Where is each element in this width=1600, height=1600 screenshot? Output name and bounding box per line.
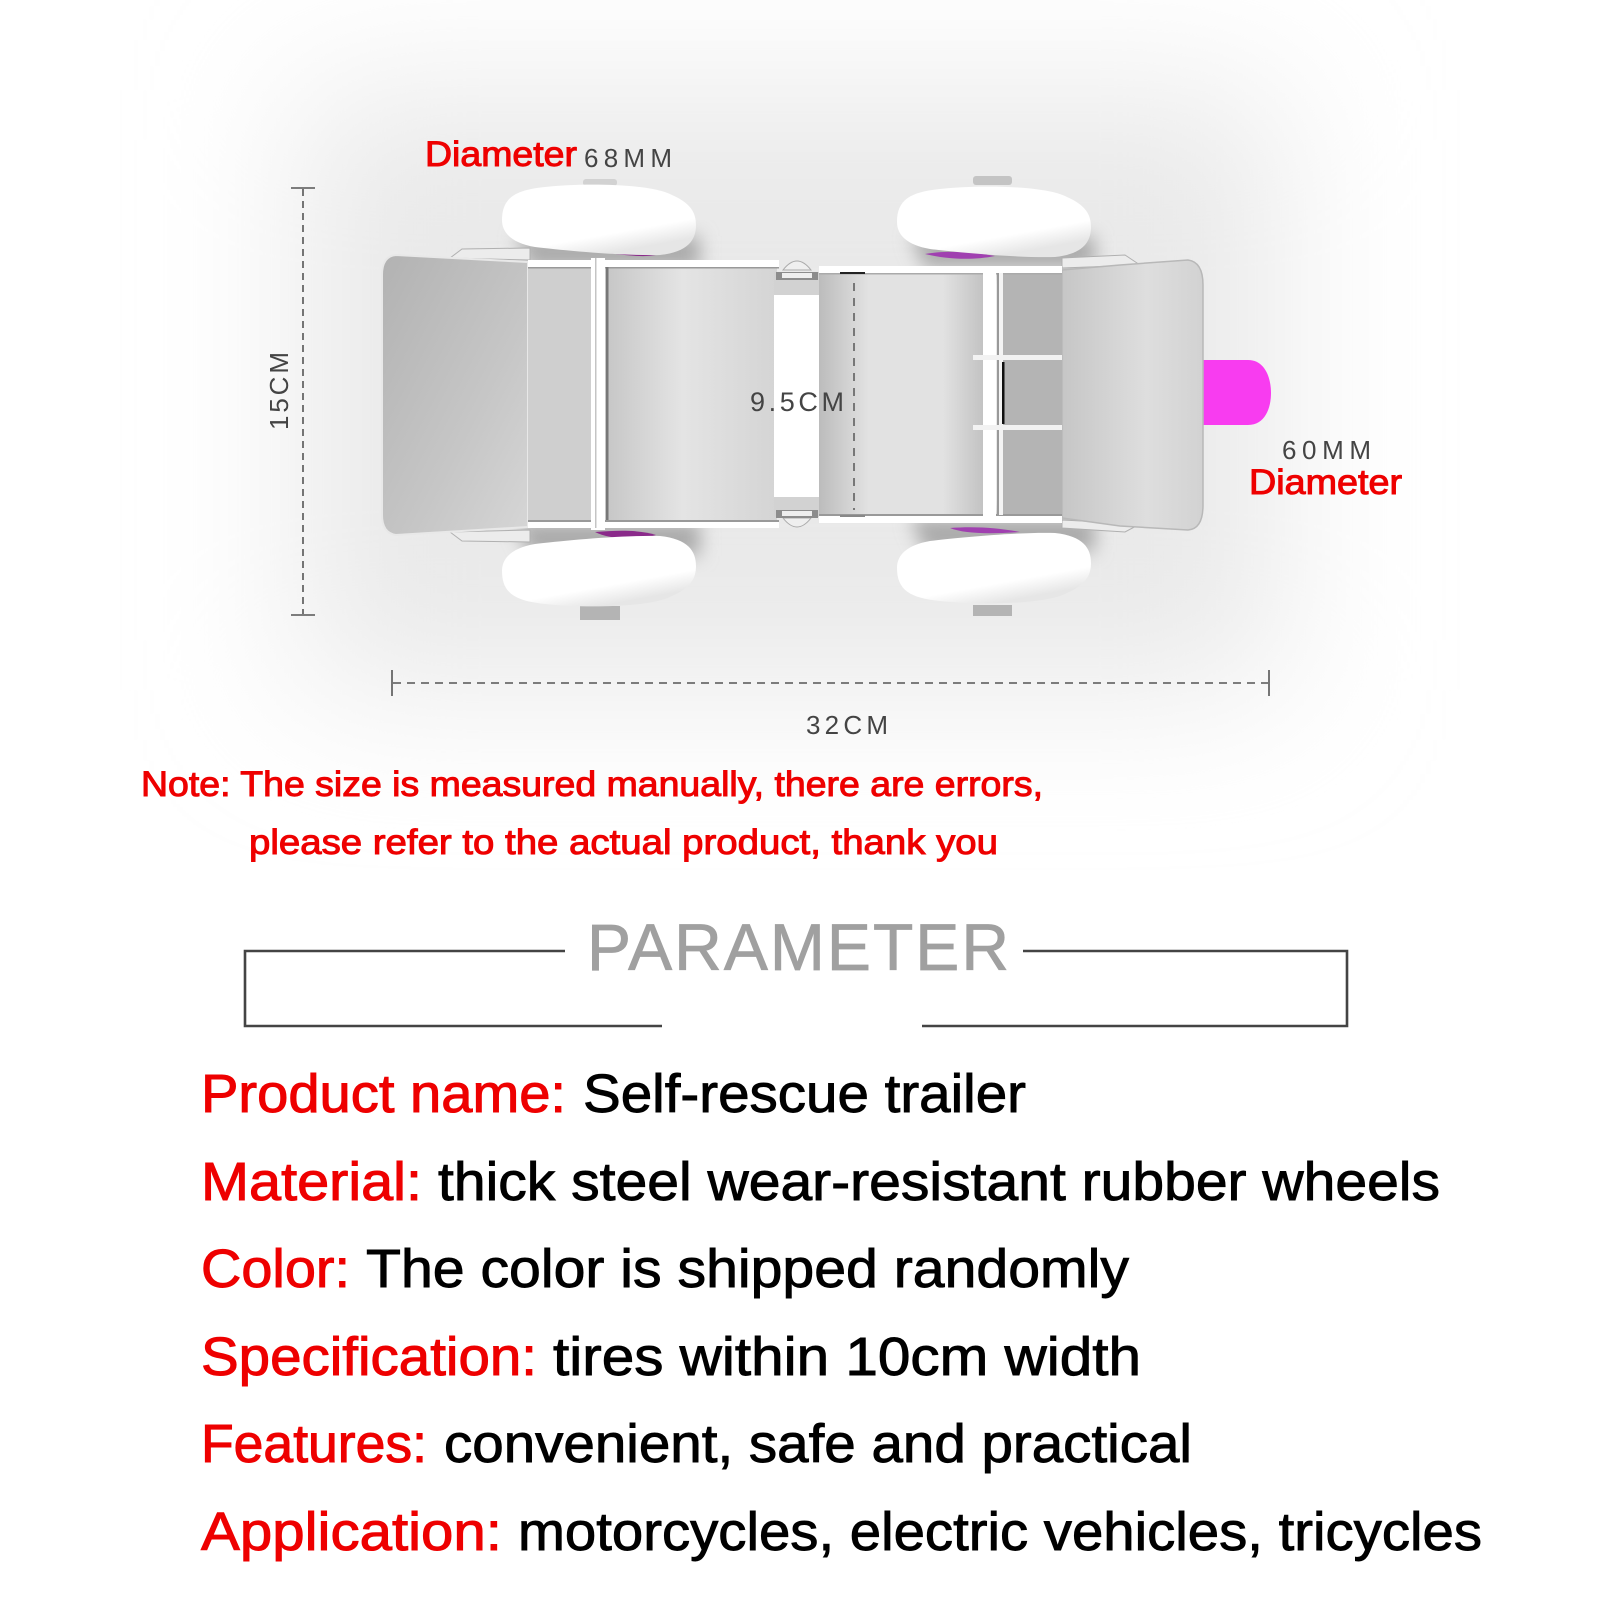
- wheel: bottom right: [897, 518, 1095, 616]
- dimension: 9.5CM dashed line: [853, 283, 855, 510]
- part: frame rails: [528, 258, 1062, 530]
- part: top hinge: [774, 261, 819, 295]
- spec: product name: [201, 1064, 1026, 1124]
- spec: application: motorcycles, electric vehicles, tricycles: [518, 1502, 1482, 1562]
- heading: PARAMETER: PARAMETER: [587, 910, 1009, 984]
- label: 9.5CM: 9.5CM: [750, 387, 844, 417]
- label: 60MM Diameter: [1249, 435, 1402, 502]
- spec: material: Material:: [201, 1152, 422, 1212]
- part: bottom hinge: [774, 497, 819, 527]
- part: right plate: [1062, 260, 1203, 530]
- wheel: top right: [897, 176, 1095, 268]
- label: 60MM Diameter: Diameter: [1249, 463, 1402, 502]
- wheel: top left: [502, 179, 700, 268]
- spec: specification: [201, 1327, 1141, 1387]
- label: Diameter 68MM: Diameter: [425, 135, 577, 174]
- label: Diameter 68MM: [425, 135, 672, 174]
- spec: application: Application:: [201, 1502, 502, 1562]
- part: left plate: [382, 255, 528, 535]
- spec: material: thick steel wear-resistant rubber wheels: [438, 1152, 1440, 1212]
- spec: product name: Product name:: [201, 1064, 566, 1124]
- heading: PARAMETER: [245, 910, 1347, 1026]
- spec: features: convenient, safe and practical: [444, 1414, 1192, 1474]
- dimension: 15CM height: 15CM: [264, 352, 294, 430]
- spec: specification: tires within 10cm width: [553, 1327, 1141, 1387]
- label: Diameter 68MM: 68MM: [584, 143, 672, 173]
- icon: trailer top view: [382, 176, 1271, 620]
- spec: product name: Self-rescue trailer: [583, 1064, 1026, 1124]
- spec list: [201, 1064, 1482, 1562]
- part: tow roller (pink): [1200, 360, 1271, 425]
- part: side brackets: [450, 248, 1140, 542]
- spec: specification: Specification:: [201, 1327, 537, 1387]
- part: left frame panels: [528, 267, 777, 520]
- wheel: bottom left: [502, 522, 700, 620]
- part: white centre strip: [774, 295, 819, 497]
- note: [141, 765, 1043, 862]
- part: right frame panels: [819, 273, 1062, 515]
- spec: color: The color is shipped randomly: [366, 1239, 1129, 1299]
- note: please refer to the actual product, thank you: [249, 823, 998, 862]
- spec: features: Features:: [201, 1414, 427, 1474]
- label: 60MM Diameter: 60MM: [1282, 435, 1371, 465]
- spec: color: Color:: [201, 1239, 350, 1299]
- note: Note: The size is measured manually, there are errors,: [141, 765, 1043, 804]
- dimension: 32CM length: 32CM: [806, 710, 888, 740]
